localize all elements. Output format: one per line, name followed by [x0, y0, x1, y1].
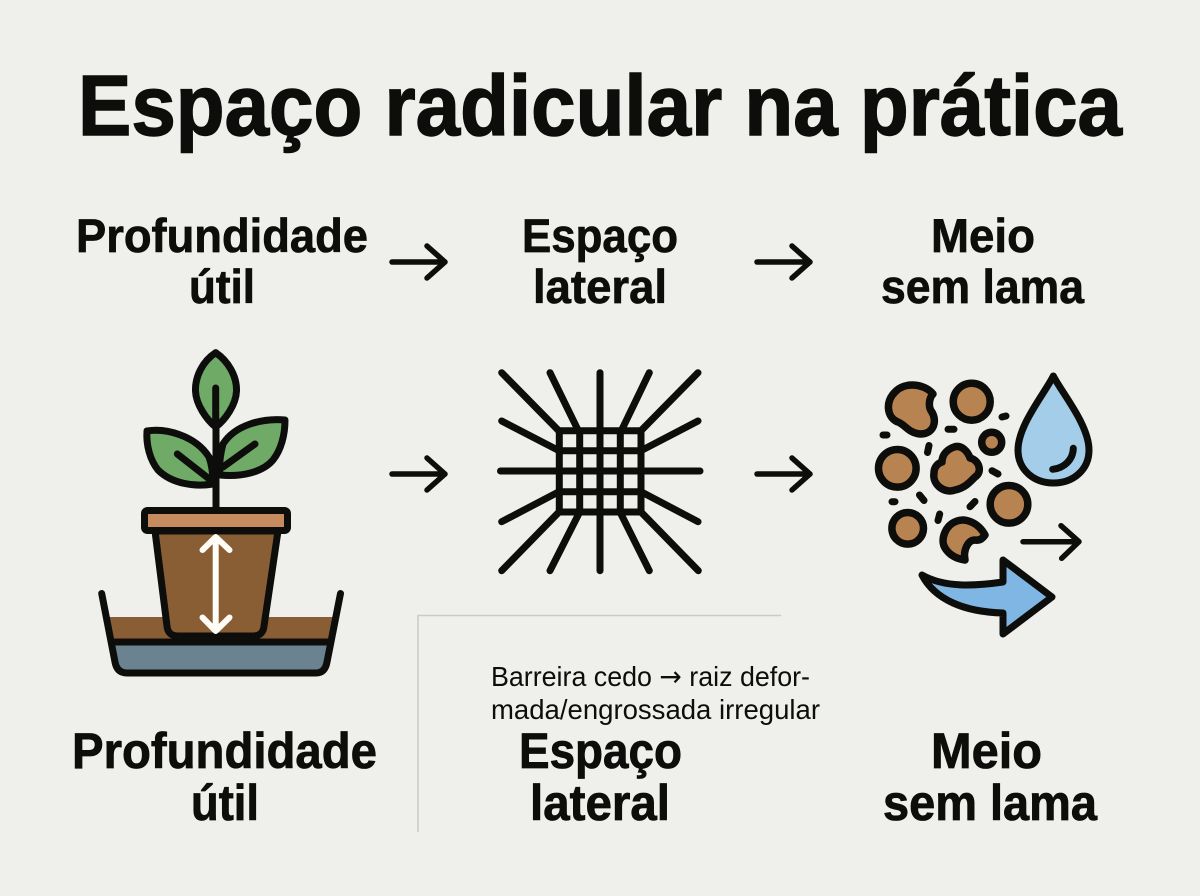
small dots [883, 416, 1006, 520]
pot rim [144, 510, 288, 530]
arrow: middle row first [392, 458, 445, 490]
title: Espaço radicular na prática [78, 59, 1123, 154]
icon: particles, water drop and drainage arrows [878, 376, 1089, 634]
bottom label: Profundidade útil: Profundidade [72, 722, 377, 779]
bottom label: Meio sem lama: sem lama [883, 774, 1098, 831]
top label: Espaço lateral: Espaço [522, 210, 678, 263]
water drop [1018, 376, 1089, 483]
bottom label: Meio sem lama [883, 722, 1098, 831]
icon: root grid with radiating lines [500, 373, 700, 571]
top label: Meio sem lama [881, 210, 1085, 314]
bottom label: Profundidade útil [72, 722, 377, 831]
curved blue arrow [922, 560, 1052, 634]
top label: Profundidade útil [76, 210, 368, 314]
top label: Profundidade útil: Profundidade [76, 210, 368, 263]
callout text [491, 660, 820, 725]
pot body [155, 531, 278, 636]
icon: potted plant in tray [102, 353, 340, 673]
stem [212, 425, 220, 510]
top label: Meio sem lama: sem lama [881, 261, 1085, 314]
top leaf [195, 353, 237, 427]
right leaf [220, 420, 285, 475]
tray outline [102, 594, 340, 673]
top label: Profundidade útil: útil [189, 261, 255, 314]
water layer in tray [113, 642, 329, 673]
bottom label: Profundidade útil: útil [191, 774, 259, 831]
top label: Meio sem lama: Meio [931, 210, 1035, 263]
drop highlight [1053, 448, 1073, 469]
arrow: top row second [757, 246, 810, 278]
bottom label: Espaço lateral: lateral [530, 774, 670, 831]
callout text: mada/engrossada irregular [491, 694, 820, 725]
arrow: middle row second [757, 458, 810, 490]
bottom label: Meio sem lama: Meio [931, 722, 1042, 779]
soil layer in tray [108, 617, 333, 642]
callout frame [418, 616, 781, 832]
top label: Espaço lateral [522, 210, 678, 314]
arrow: top row first [392, 246, 445, 278]
callout text: Barreira cedo → raiz defor- [491, 660, 810, 693]
left leaf [147, 430, 213, 485]
particles [878, 383, 1028, 560]
small right arrow [1023, 526, 1079, 558]
depth arrow [202, 537, 230, 631]
top label: Espaço lateral: lateral [533, 261, 667, 314]
bottom label: Espaço lateral [519, 722, 682, 831]
bottom label: Espaço lateral: Espaço [519, 722, 682, 779]
